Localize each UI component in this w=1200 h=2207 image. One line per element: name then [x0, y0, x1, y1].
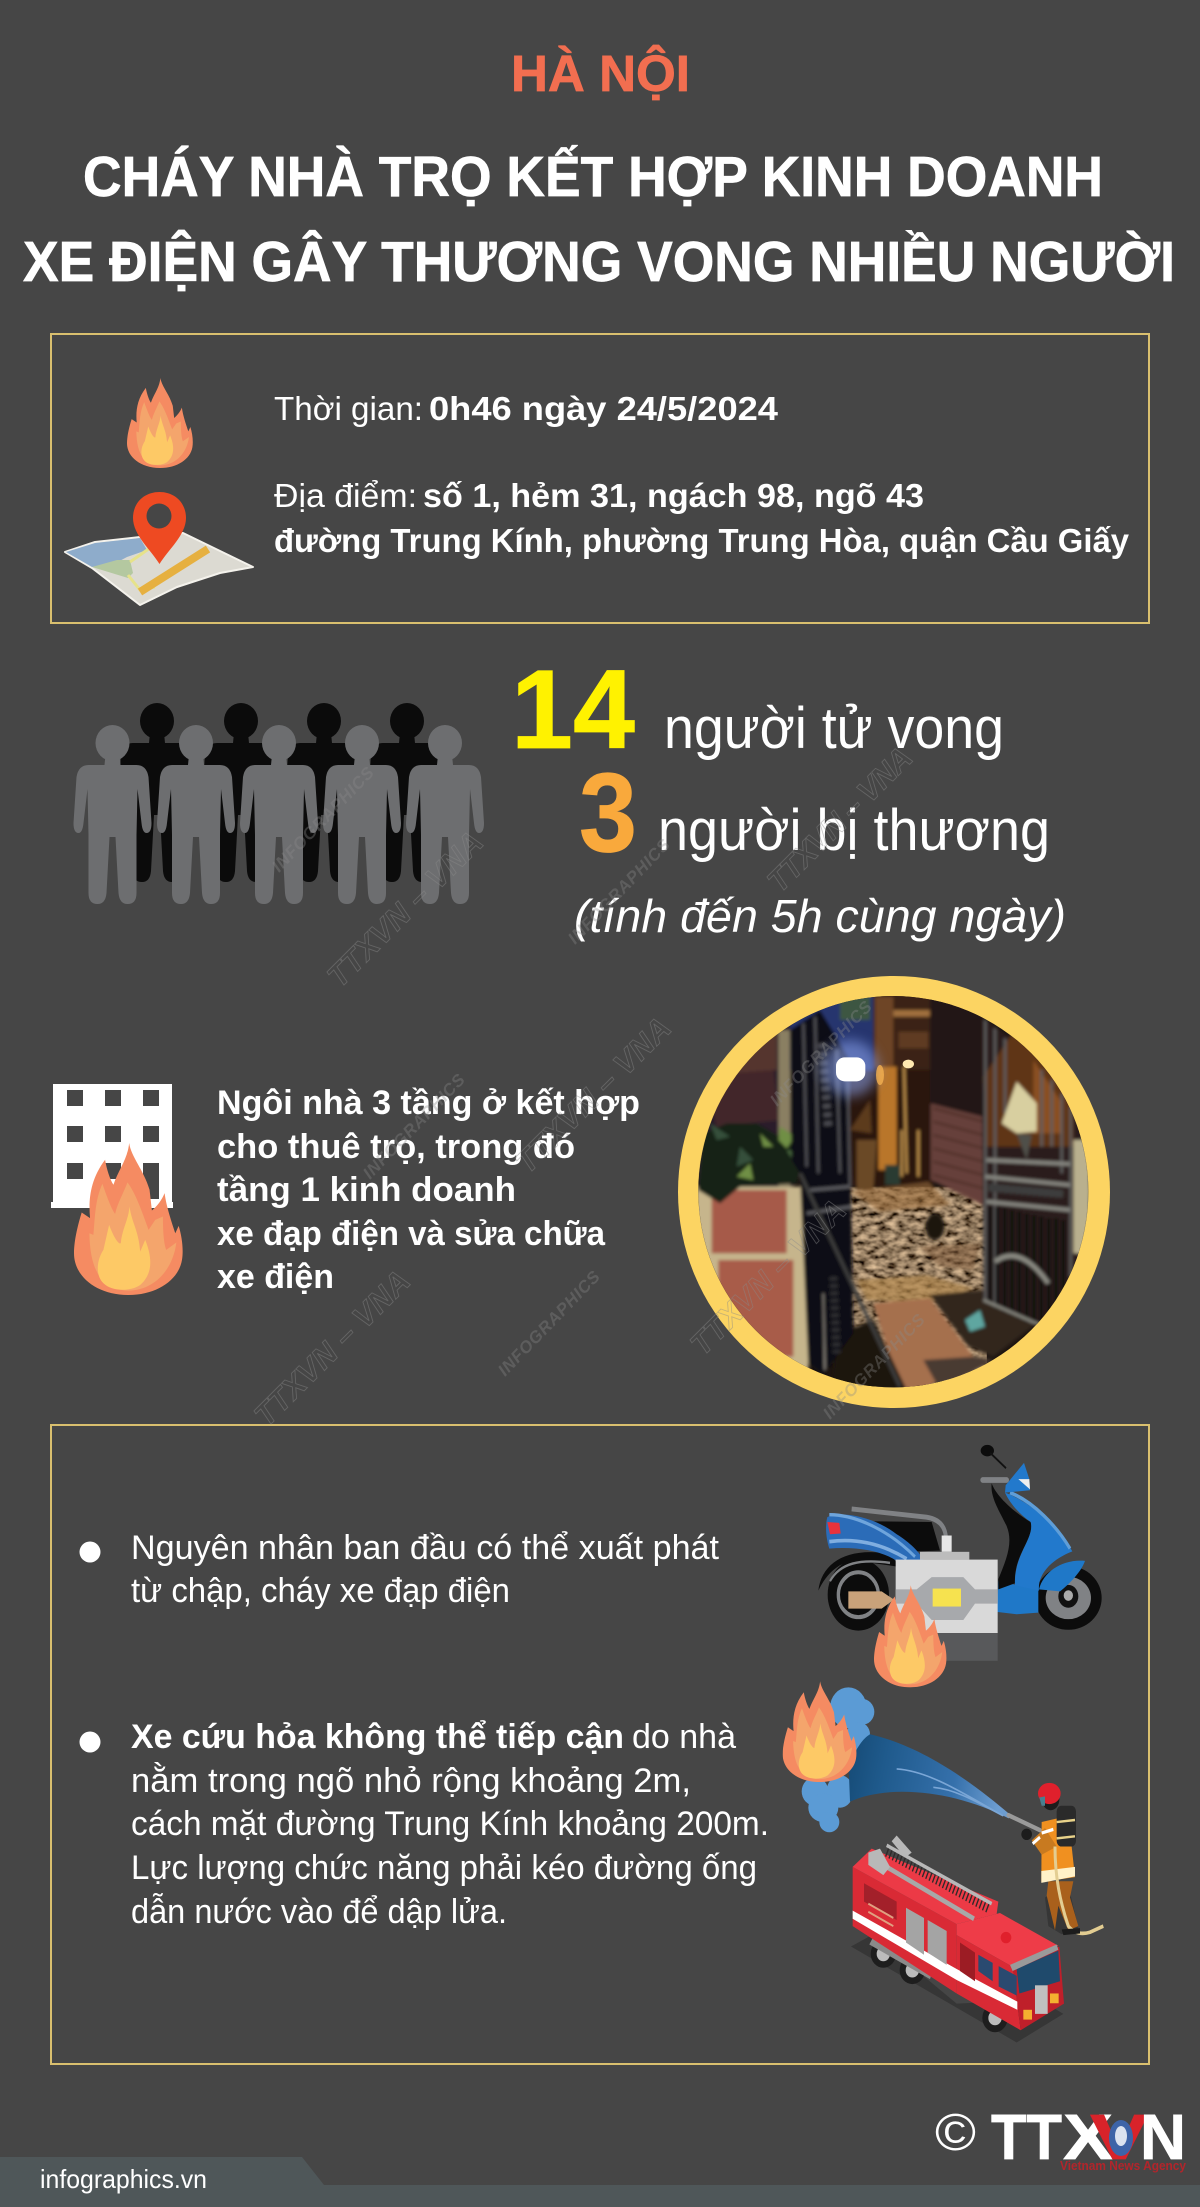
photo: burnt alley in yellow ring: [678, 976, 1110, 1408]
windows and shutters: [960, 1942, 975, 1981]
nozzle: [1008, 1815, 1040, 1830]
wheels: [828, 1559, 889, 1631]
statistic: injured: [579, 750, 1050, 875]
logo: copyright TTXVN: TT: [991, 2101, 1062, 2173]
front body: [997, 1581, 1038, 1614]
statistic: deaths: người tử vong: [664, 696, 1004, 761]
bullet: access problem: Lực lượng chức năng phải kéo đường ống: [131, 1849, 757, 1887]
stripe: [853, 1911, 1017, 2010]
title: CHÁY NHÀ TRỌ KẾT HỢP KINH DOANH: [83, 144, 1103, 209]
statistic: injured: người bị thương: [658, 798, 1050, 863]
bullet: initial cause: Nguyên nhân ban đầu có thể xuất phát: [131, 1529, 720, 1567]
debris texture: [847, 1187, 987, 1393]
bullet: access problem: [80, 1718, 769, 1931]
watermarks: TTXVN – VNA: [247, 1263, 417, 1433]
text: place: [274, 477, 1130, 559]
text: place: đường Trung Kính, phường Trung Hòa, quận Cầu Giấy: [274, 522, 1130, 559]
watermarks: INFOGRAPHICS: [819, 1310, 929, 1423]
lower floor: [873, 1298, 973, 1390]
left gate: [790, 1010, 853, 1375]
text: place: Địa điểm:: [274, 477, 417, 514]
bullet: access problem: cách mặt đường Trung Kính khoảng 200m.: [131, 1805, 769, 1843]
floor patches: [852, 1182, 950, 1212]
icon: electric scooter with burning battery: [818, 1445, 1102, 1687]
watermarks: [247, 740, 929, 1433]
ladder: [887, 1852, 988, 1908]
right gate background: [982, 1017, 1087, 1323]
watermarks: TTXVN – VNA: [320, 824, 490, 994]
text: building description: cho thuê trọ, trong đó: [217, 1128, 575, 1166]
icon: firefighter spraying water at flame: [783, 1681, 1103, 1935]
water jet: [849, 1734, 1011, 1818]
body: [853, 1867, 957, 1993]
watermarks: INFOGRAPHICS: [494, 1267, 604, 1380]
title: [23, 144, 1175, 294]
icon: fire truck: [851, 1836, 1064, 2042]
text: time: Thời gian:: [274, 390, 423, 427]
logo: copyright TTXVN: V: [1090, 2101, 1148, 2173]
lights: [822, 1040, 878, 1097]
plant: [698, 1123, 803, 1203]
text: building description: [217, 1084, 640, 1296]
text: time: 0h46 ngày 24/5/2024: [429, 390, 779, 427]
left wall: [697, 1020, 793, 1193]
statistic: deaths: 14: [511, 647, 635, 772]
exhaust: [848, 1591, 894, 1609]
bullet: access problem: dẫn nước vào để dập lửa.: [131, 1893, 507, 1931]
cloth: [1002, 1082, 1037, 1133]
panel: causes and firefighting: [51, 1425, 1149, 2064]
wheels: [871, 1940, 896, 1968]
battery: [942, 1536, 952, 1552]
watermarks: TTXVN – VNA: [683, 1192, 853, 1362]
logo: copyright TTXVN: ©: [935, 2104, 976, 2162]
alley: [847, 1070, 933, 1187]
statistic: injured: 3: [579, 750, 637, 875]
watermarks: TTXVN – VNA: [760, 740, 919, 899]
statistic: deaths: [511, 647, 1004, 772]
footer band: [0, 2157, 1200, 2207]
sky: [790, 993, 877, 1070]
text: building description: tầng 1 kinh doanh: [217, 1171, 516, 1209]
footer: website: infographics.vn: [40, 2164, 207, 2194]
logo: copyright TTXVN: Vietnam News Agency: [1060, 2158, 1187, 2173]
watermarks: INFOGRAPHICS: [766, 997, 876, 1110]
right gate bars: [985, 1020, 1071, 1307]
bullet: access problem: do nhà: [632, 1718, 736, 1756]
icon: flame: [127, 378, 193, 468]
watermarks: TTXVN – VNA: [508, 1010, 678, 1180]
watermarks: INFOGRAPHICS: [359, 1070, 469, 1183]
panel: time and place: [51, 334, 1149, 623]
bullet: initial cause: [80, 1529, 720, 1610]
logo: copyright TTXVN: X: [1063, 2101, 1113, 2173]
icon: burning building: [51, 1084, 183, 1295]
watermarks: INFOGRAPHICS: [564, 835, 674, 948]
logo: copyright TTXVN: N: [1140, 2101, 1186, 2173]
note: as of 5h: (tính đến 5h cùng ngày): [574, 890, 1066, 942]
text: place: số 1, hẻm 31, ngách 98, ngõ 43: [423, 477, 924, 514]
icon: group of people: [74, 703, 484, 904]
icon: map with pin: [65, 492, 253, 605]
upper right and brick wall: [930, 1000, 983, 1116]
firefighter: [1045, 1885, 1078, 1934]
bullet: access problem: nằm trong ngõ nhỏ rộng khoảng 2m,: [131, 1762, 691, 1800]
seat and rear body: [852, 1509, 946, 1538]
text: building description: xe đạp điện và sửa chữa: [217, 1215, 606, 1253]
bullet: initial cause: từ chập, cháy xe đạp điện: [131, 1572, 510, 1610]
bullet: access problem: Xe cứu hỏa không thể tiếp cận: [131, 1718, 624, 1756]
smoke clouds: [802, 1687, 874, 1832]
handlebar and mirror: [983, 1473, 1007, 1487]
logo: copyright TTXVN: [935, 2101, 1187, 2173]
text: building description: Ngôi nhà 3 tầng ở kết hợp: [217, 1084, 640, 1122]
text: building description: xe điện: [217, 1258, 334, 1296]
text: time: [274, 390, 779, 427]
heading: Hà Nội: HÀ NỘI: [511, 44, 690, 102]
lower left panel: [697, 1187, 808, 1387]
watermarks: INFOGRAPHICS: [268, 763, 378, 876]
